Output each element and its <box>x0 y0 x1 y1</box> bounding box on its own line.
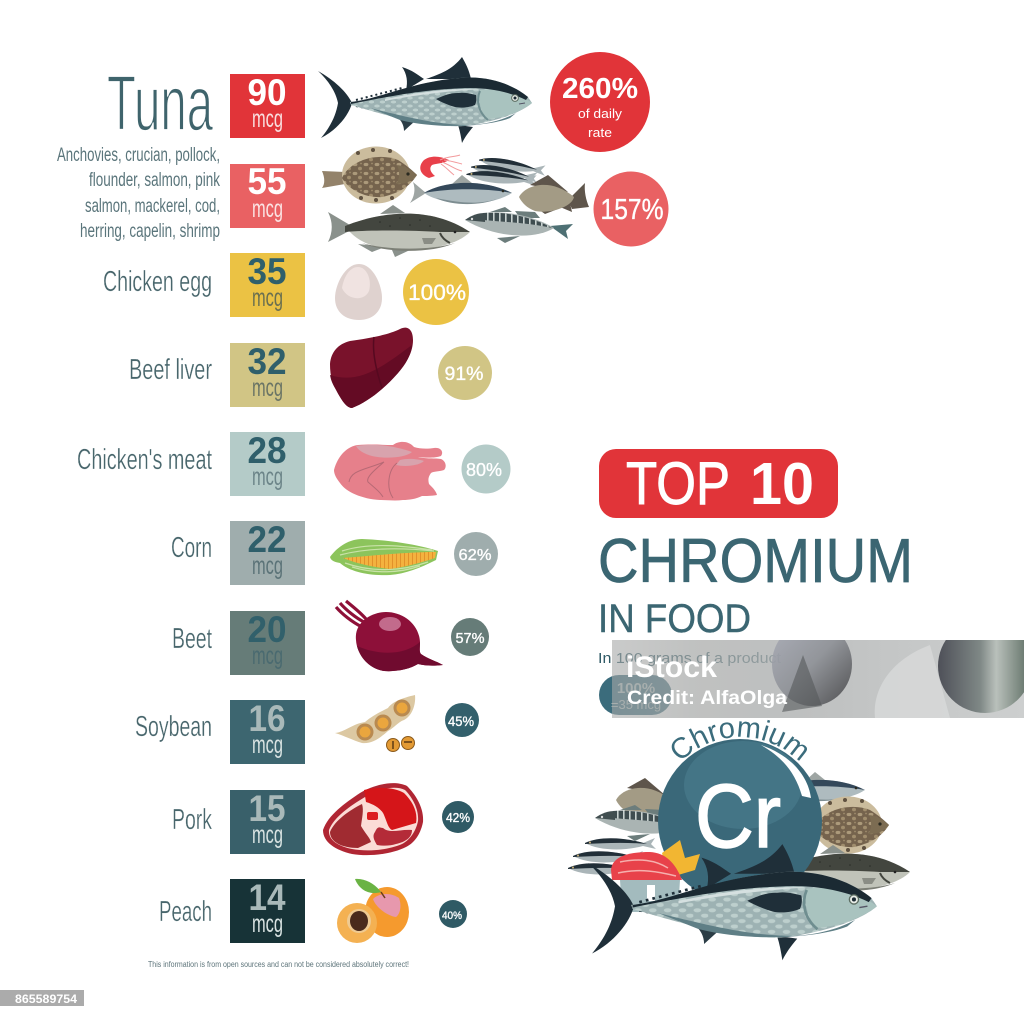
value box: 35 mcg <box>230 251 305 317</box>
icon: beet <box>336 601 443 671</box>
circle: 45% <box>445 703 479 737</box>
circle: 260% of daily rate: 260% <box>562 73 638 105</box>
value box: 28 mcg: mcg <box>252 463 283 491</box>
label: Corn <box>171 532 212 564</box>
icon: chicken meat <box>334 442 446 500</box>
circle: 100% <box>403 259 469 325</box>
subheading: In 100 grams of a product <box>598 651 781 667</box>
circle: 80%: 80% <box>466 460 502 480</box>
value box: 14 mcg: 14 <box>248 877 286 918</box>
value box: 14 mcg <box>230 877 305 943</box>
value box: 28 mcg <box>230 430 305 496</box>
row: beef liver <box>129 328 492 408</box>
watermark text: iStock <box>626 651 717 684</box>
circle: 57%: 57% <box>456 631 485 647</box>
circle: 260% of daily rate: rate <box>588 125 612 140</box>
label: Tuna: Tuna <box>107 59 213 147</box>
icon: soybean <box>335 695 415 752</box>
value box: 22 mcg: mcg <box>252 552 283 580</box>
value box: 16 mcg: mcg <box>252 731 283 759</box>
row: beet <box>172 601 489 675</box>
circle: 80% <box>462 444 510 494</box>
value box: 90 mcg: 90 <box>248 72 286 113</box>
value box: 16 mcg: 16 <box>248 698 286 739</box>
icon: tuna <box>318 57 532 143</box>
label: Pork <box>172 804 212 836</box>
badge: TOP 10: TOP <box>626 450 730 517</box>
pill: 100% = 35 mcg <box>599 675 672 715</box>
value box: 28 mcg: 28 <box>248 430 286 471</box>
value box: 22 mcg <box>230 519 305 585</box>
circle: 45%: 45% <box>448 714 474 729</box>
row: chicken egg <box>103 251 469 325</box>
watermark text: Credit: AlfaOlga <box>627 688 787 709</box>
big tuna <box>588 844 877 960</box>
value box: 15 mcg: mcg <box>252 821 283 849</box>
row: fish group <box>57 145 668 257</box>
label: fish list: herring, capelin, shrimp <box>80 221 220 242</box>
circle: 260% of daily rate: of daily <box>578 106 623 121</box>
heading: IN FOOD: IN FOOD <box>598 597 751 641</box>
chromium illustration <box>568 720 910 960</box>
row: peach <box>159 877 467 943</box>
circle: 62% <box>454 532 498 576</box>
value box: 55 mcg <box>230 161 305 228</box>
circle: 40%: 40% <box>442 910 462 922</box>
image id badge <box>0 990 84 1006</box>
badge: TOP 10 <box>599 449 838 518</box>
pill: 100% = 35 mcg: 100% <box>617 680 655 697</box>
circle: 40% <box>439 900 467 928</box>
value box: 14 mcg: mcg <box>252 910 283 938</box>
value box: 20 mcg: mcg <box>252 642 283 670</box>
circle: 157% <box>594 172 668 246</box>
watermark band <box>612 640 1024 718</box>
fish behind circle <box>568 772 910 897</box>
label: Chicken's meat <box>77 444 212 476</box>
icon: pork steak <box>323 783 423 855</box>
circle: 42%: 42% <box>446 811 470 825</box>
element circle <box>658 739 822 903</box>
row: soybean <box>135 695 479 764</box>
value box: 20 mcg: 20 <box>248 609 286 650</box>
circle: 100%: 100% <box>408 280 466 305</box>
label: Chicken egg <box>103 266 212 298</box>
value box: 35 mcg: mcg <box>252 284 283 312</box>
label: Soybean <box>135 711 212 743</box>
label: fish list: Anchovies, crucian, pollock, <box>57 145 220 166</box>
image id badge: 865589754 <box>15 994 78 1006</box>
circle: 57% <box>451 618 489 656</box>
row: chicken's meat <box>77 430 510 500</box>
label: fish list <box>57 145 220 242</box>
value box: 15 mcg <box>230 788 305 854</box>
row: corn <box>171 519 498 585</box>
icon: corn <box>330 539 438 575</box>
label: Peach <box>159 896 212 928</box>
label: Beet <box>172 623 212 655</box>
circle: 260% of daily rate <box>550 52 650 152</box>
footnote: This information is from open sources and can not be considered absolutely correct! <box>148 960 409 969</box>
icon: peach <box>337 879 409 943</box>
value box: 16 mcg <box>230 698 305 764</box>
circle: 91%: 91% <box>444 364 484 385</box>
row: tuna <box>107 52 650 152</box>
value box: 35 mcg: 35 <box>248 251 286 292</box>
icon: egg <box>335 264 382 320</box>
circle: 157%: 157% <box>600 194 664 226</box>
icons: assorted fish <box>322 146 589 257</box>
circle: 42% <box>442 801 474 833</box>
value box: 15 mcg: 15 <box>248 788 286 829</box>
element circle: Cr <box>695 767 781 867</box>
label: Beef liver <box>129 354 212 386</box>
label: curved Chromium: Chromium <box>672 720 807 761</box>
bowl of shrimp and lemon <box>611 840 700 912</box>
value box: 55 mcg: 55 <box>248 161 286 202</box>
circle: 91% <box>438 346 492 400</box>
value box: 90 mcg: mcg <box>252 105 283 133</box>
heading: CHROMIUM: CHROMIUM <box>598 527 913 596</box>
label: fish list: flounder, salmon, pink <box>89 170 220 191</box>
icon: liver <box>330 328 413 408</box>
value box: 55 mcg: mcg <box>252 195 283 223</box>
watermark text <box>626 651 787 709</box>
value box: 32 mcg: mcg <box>252 374 283 402</box>
row: pork <box>172 783 474 855</box>
badge: TOP 10: 10 <box>750 451 814 517</box>
value box: 32 mcg: 32 <box>248 341 286 382</box>
value box: 20 mcg <box>230 609 305 675</box>
circle: 62%: 62% <box>458 547 492 564</box>
value box: 22 mcg: 22 <box>248 519 286 560</box>
value box: 90 mcg <box>230 72 305 138</box>
value box: 32 mcg <box>230 341 305 407</box>
label: fish list: salmon, mackerel, cod, <box>85 196 220 217</box>
pill: 100% = 35 mcg: =35 mcg <box>611 697 661 712</box>
